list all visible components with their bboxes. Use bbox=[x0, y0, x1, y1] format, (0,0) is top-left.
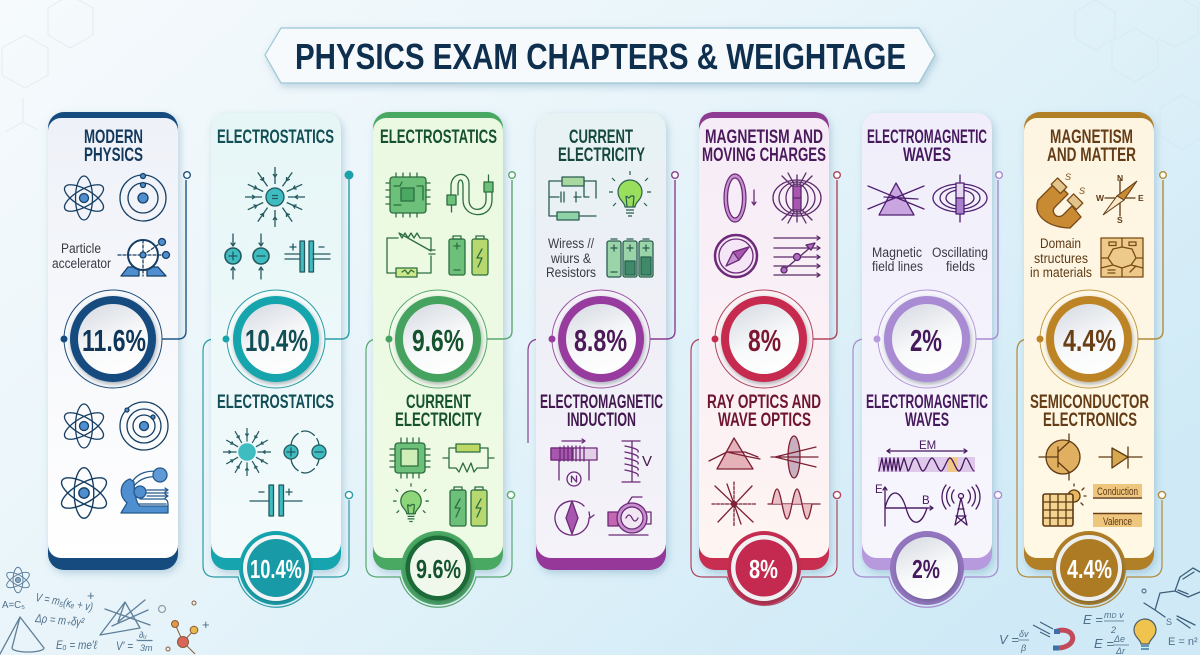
badge: 8%: 8% bbox=[749, 554, 778, 584]
heading bbox=[867, 126, 987, 166]
heading bbox=[84, 126, 143, 166]
icon: generator bbox=[608, 497, 651, 535]
label: particle accelerator: accelerator bbox=[52, 256, 111, 271]
icon: chip lower bbox=[390, 438, 430, 478]
badge: 4.4% bbox=[1052, 531, 1126, 605]
icon: light rays bbox=[712, 482, 756, 526]
icon: compass bbox=[555, 501, 594, 535]
icon: electric field bbox=[245, 167, 305, 227]
icon: small atom bbox=[4, 567, 32, 593]
label: oscillating fields: fields bbox=[946, 259, 975, 274]
heading lower: ELECTROMAGNETIC bbox=[540, 391, 663, 413]
icon: atom large bbox=[57, 468, 111, 518]
ring: 11.6% bbox=[60, 290, 162, 388]
badge: 9.6% bbox=[401, 531, 475, 605]
formula text: E = n² bbox=[1168, 636, 1198, 648]
label: wires and resistors: Wiress // bbox=[548, 236, 594, 251]
icon: E-B wave bbox=[875, 484, 933, 526]
icon: vertical coil bbox=[622, 441, 652, 482]
connector dot bbox=[345, 491, 353, 499]
icon: horseshoe magnet bbox=[1037, 172, 1085, 228]
badge: 4.4%: 4.4% bbox=[1067, 554, 1112, 584]
icon: current loop bbox=[724, 174, 756, 222]
panel: current electricity bbox=[528, 113, 678, 570]
bump outline bbox=[203, 339, 349, 607]
icon: circuit chip bbox=[386, 173, 430, 217]
icon: circuit bbox=[387, 233, 435, 277]
connector dot bbox=[1158, 491, 1166, 499]
icon: circuit diagram bbox=[549, 177, 596, 220]
fraction bars bbox=[1018, 621, 1129, 645]
ring: 10.4% bbox=[222, 290, 325, 388]
heading lower bbox=[395, 391, 482, 431]
badge: 10.4%: 10.4% bbox=[250, 554, 302, 584]
heading lower: CURRENT bbox=[406, 391, 471, 413]
panel: electrostatics green bbox=[366, 112, 515, 607]
ring: 8.8% bbox=[548, 290, 650, 388]
icon: transistor bbox=[1039, 434, 1080, 480]
icon: prism bbox=[868, 183, 924, 215]
ring: 2%: 2% bbox=[910, 323, 942, 358]
icon: capacitor bbox=[285, 241, 330, 272]
formula text bbox=[999, 610, 1198, 655]
icon: E-B wave: B bbox=[922, 495, 930, 507]
badge: 2%: 2% bbox=[912, 554, 940, 584]
heading lower: WAVE OPTICS bbox=[718, 409, 811, 431]
heading: AND MATTER bbox=[1047, 144, 1136, 166]
card body bbox=[373, 112, 503, 570]
connector bbox=[1138, 172, 1166, 339]
formula text: Eₒ = me′ℓ bbox=[56, 638, 98, 652]
icon: compass rose bbox=[1096, 173, 1144, 225]
formula text: δv bbox=[1019, 629, 1029, 639]
icon: EM spectrum: EM bbox=[919, 440, 936, 452]
heading: ELECTROSTATICS bbox=[380, 126, 497, 148]
icon: batteries bbox=[449, 236, 488, 275]
connector bbox=[650, 172, 678, 339]
heading lower: ELECTRICITY bbox=[395, 409, 482, 431]
label: magnetic field lines bbox=[872, 245, 923, 274]
label: magnetic field lines: Magnetic bbox=[872, 245, 922, 260]
icon: coil bbox=[551, 439, 597, 486]
heading lower: ELECTROMAGNETIC bbox=[866, 391, 988, 413]
icon: orbit rings lower bbox=[120, 402, 168, 450]
icon: bulb green bbox=[609, 171, 651, 216]
icon: horseshoe magnet: S bbox=[1065, 172, 1071, 182]
icon: valence band bbox=[1093, 514, 1142, 528]
label: oscillating fields bbox=[932, 245, 988, 274]
label: domain structures: Domain bbox=[1040, 236, 1081, 251]
card body bbox=[1024, 112, 1154, 570]
label: wires and resistors: Resistors bbox=[546, 265, 596, 280]
panel: electrostatics teal bbox=[203, 113, 353, 607]
icon: cable bbox=[447, 174, 493, 215]
icon: domain grid bbox=[1101, 238, 1143, 277]
icon: compass bbox=[715, 235, 757, 277]
icon: radial field bbox=[223, 428, 271, 476]
card body bbox=[536, 113, 666, 570]
heading lower bbox=[540, 391, 663, 431]
icon: atom lower bbox=[61, 404, 107, 448]
formula text: 2 bbox=[1110, 625, 1116, 635]
heading lower: INDUCTION bbox=[567, 409, 636, 431]
heading: ELECTROSTATICS bbox=[217, 126, 334, 148]
heading lower: SEMICONDUCTOR bbox=[1030, 391, 1149, 413]
icon: E-B wave: E bbox=[875, 484, 883, 496]
label: wires and resistors: wiurs & bbox=[550, 251, 591, 266]
label: domain structures: structures bbox=[1034, 251, 1088, 266]
heading: ELECTRICITY bbox=[558, 144, 645, 166]
icon: bulb small bbox=[1134, 619, 1156, 649]
sketch: molecule bbox=[166, 601, 198, 654]
connector dot bbox=[507, 491, 515, 499]
formula text: E = bbox=[1083, 612, 1103, 627]
icon: resistor network bbox=[443, 444, 494, 472]
heading: MAGNETISM bbox=[1050, 126, 1133, 148]
label: particle accelerator bbox=[52, 241, 111, 271]
formula text: V = m₅(κₑ + v) bbox=[34, 590, 94, 614]
formula text: A=C₅ bbox=[2, 600, 25, 611]
ring: 8%: 8% bbox=[748, 323, 781, 358]
formula text: Δe bbox=[1113, 634, 1125, 644]
ring: 2% bbox=[874, 290, 976, 388]
heading lower bbox=[707, 391, 821, 431]
icon: conduction band bbox=[1093, 484, 1142, 498]
formula text: ∂ᵤ bbox=[139, 630, 147, 640]
ring: 4.4% bbox=[1036, 290, 1138, 388]
icon: compass rose: N bbox=[1117, 173, 1123, 183]
icon: prism bbox=[709, 438, 760, 469]
heading: MAGNETISM AND bbox=[705, 126, 823, 148]
formula text bbox=[2, 588, 210, 653]
formula text: Δρ = m₊δγ² bbox=[34, 611, 86, 629]
formula text: + bbox=[87, 588, 95, 603]
heading: MOVING CHARGES bbox=[702, 144, 826, 166]
decoration: formulas bottom left bbox=[0, 567, 210, 654]
connector bbox=[487, 172, 515, 339]
connector dot bbox=[833, 491, 841, 499]
bump outline bbox=[1017, 339, 1162, 607]
label: wires and resistors bbox=[546, 236, 596, 280]
heading lower: ELECTROSTATICS bbox=[217, 391, 334, 413]
formula text: V = bbox=[999, 632, 1019, 647]
left connector bbox=[528, 339, 552, 443]
icon: horseshoe magnet: S bbox=[1079, 186, 1085, 196]
panel: magnetism and matter bbox=[1017, 112, 1166, 607]
panel: magnetism and moving charges bbox=[691, 112, 841, 605]
connector dot bbox=[994, 491, 1002, 499]
icon: accelerator bbox=[118, 238, 170, 276]
label: particle accelerator: Particle bbox=[61, 241, 101, 256]
heading lower: ELECTRONICS bbox=[1043, 409, 1137, 431]
label: domain structures: in materials bbox=[1030, 265, 1092, 280]
icon: dipole bbox=[284, 431, 326, 473]
card body bbox=[699, 112, 829, 570]
formula text: 3m bbox=[140, 643, 153, 653]
bump outline bbox=[853, 339, 998, 607]
formula text: β bbox=[1020, 643, 1026, 653]
ring: 4.4%: 4.4% bbox=[1063, 323, 1116, 358]
badge: 10.4% bbox=[239, 531, 313, 605]
heading lower bbox=[1030, 391, 1149, 431]
formula text: E = bbox=[1094, 636, 1114, 651]
badge: 8% bbox=[727, 531, 801, 605]
decoration: formulas bottom right bbox=[999, 568, 1200, 655]
icon: orbit rings bbox=[120, 174, 166, 221]
ring: 11.6%: 11.6% bbox=[82, 323, 146, 358]
icon: capacitor lower bbox=[250, 485, 302, 516]
icon: diode bbox=[1099, 447, 1142, 468]
icon: bulb bbox=[393, 483, 429, 521]
sketch: cone and prism bbox=[0, 600, 166, 654]
card body bbox=[211, 113, 341, 570]
icon: batteries lower bbox=[450, 487, 487, 526]
icon: conduction band: Conduction bbox=[1097, 486, 1138, 498]
icon: sine wave bbox=[768, 489, 820, 519]
heading lower bbox=[866, 391, 988, 431]
label: magnetic field lines: field lines bbox=[872, 259, 923, 274]
heading: PHYSICS bbox=[84, 144, 143, 166]
sketch: molecule structure bbox=[1144, 568, 1200, 628]
heading: ELECTROMAGNETIC bbox=[867, 126, 987, 148]
formula text: mD v bbox=[1104, 610, 1124, 620]
icon: oscillating magnet bbox=[933, 175, 987, 222]
connector bbox=[813, 172, 840, 339]
heading: MODERN bbox=[84, 126, 143, 148]
icon: moving charges bbox=[774, 236, 820, 277]
heading: CURRENT bbox=[569, 126, 633, 148]
formula text: V′ = bbox=[116, 639, 133, 653]
title: PHYSICS EXAM CHAPTERS & WEIGHTAGE bbox=[295, 36, 906, 77]
connector bbox=[162, 172, 190, 339]
icon: EM spectrum bbox=[878, 440, 975, 472]
card body bbox=[48, 112, 178, 570]
panel: modern physics bbox=[48, 112, 190, 570]
formula text: S bbox=[1166, 617, 1172, 627]
icon: cyclotron bbox=[121, 468, 168, 513]
card body bbox=[862, 113, 992, 570]
ring: 8.8%: 8.8% bbox=[574, 323, 627, 358]
heading lower: RAY OPTICS AND bbox=[707, 391, 821, 413]
icon: bar magnet field bbox=[773, 173, 821, 223]
badge: 2% bbox=[890, 531, 964, 605]
bump outline bbox=[691, 339, 837, 605]
icon: compass rose: E bbox=[1138, 193, 1144, 203]
ring: 9.6% bbox=[386, 290, 487, 388]
heading bbox=[558, 126, 645, 166]
badge: 9.6%: 9.6% bbox=[416, 554, 461, 584]
icon: three batteries bbox=[607, 239, 653, 277]
icon: compass rose: W bbox=[1096, 193, 1105, 203]
icon: valence band: Valence bbox=[1103, 516, 1132, 528]
connector bbox=[976, 172, 1002, 339]
ring: 9.6%: 9.6% bbox=[412, 323, 464, 358]
icon: lens bbox=[771, 436, 818, 478]
heading bbox=[702, 126, 826, 166]
ring: 8% bbox=[712, 290, 813, 388]
label: domain structures bbox=[1030, 236, 1092, 280]
icon: compass rose: S bbox=[1117, 215, 1123, 225]
bump outline bbox=[366, 339, 512, 607]
ring: 10.4%: 10.4% bbox=[245, 323, 308, 358]
heading lower: WAVES bbox=[905, 409, 949, 431]
heading: WAVES bbox=[903, 144, 951, 166]
label: oscillating fields: Oscillating bbox=[932, 245, 988, 260]
title banner bbox=[265, 28, 935, 83]
connector bbox=[325, 171, 353, 339]
icon: solar panel bbox=[1043, 484, 1086, 526]
formula text: + bbox=[202, 617, 210, 632]
icon: atom bbox=[61, 176, 107, 220]
icon: horseshoe magnet small bbox=[1033, 622, 1073, 648]
heading bbox=[1047, 126, 1136, 166]
panel: electromagnetic waves bbox=[853, 113, 1002, 607]
icon: charges bbox=[225, 234, 269, 279]
icon: radio tower bbox=[942, 485, 980, 525]
icon: vertical coil: V bbox=[642, 453, 652, 470]
